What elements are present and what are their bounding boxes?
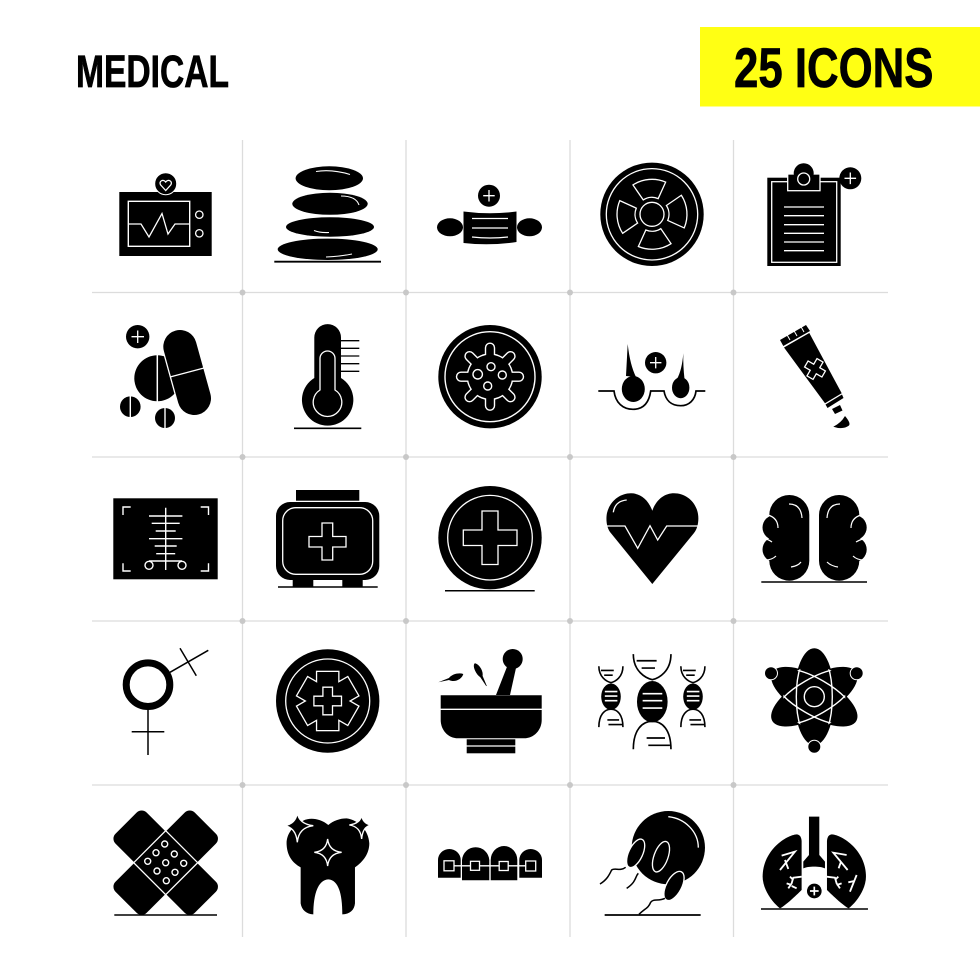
icon: medical mask [437, 185, 542, 244]
icon: mortar and pestle [438, 649, 542, 753]
icon: sperm and egg [600, 811, 705, 915]
icon: thermometer [294, 324, 361, 428]
icon: ointment tube [780, 325, 850, 428]
icon: plus circle [438, 486, 542, 591]
icon: clipboard [767, 163, 861, 266]
icon: gender symbol [126, 648, 208, 755]
icon: crossed bandages [111, 808, 221, 918]
icon: star of life emblem [276, 649, 379, 753]
badge: 25 icons [700, 27, 980, 106]
icon: heart monitor [119, 173, 212, 256]
icon: dental braces [438, 846, 542, 880]
icon: hair follicles [598, 344, 705, 409]
icon: dna strands [599, 654, 705, 749]
icon: lungs [761, 817, 868, 909]
icon: virus [438, 325, 542, 428]
icon: pills [120, 325, 204, 428]
icon: spa stones [274, 166, 381, 262]
icon: x-ray [113, 498, 218, 579]
icon: shining tooth [284, 812, 371, 914]
title: MEDICAL [76, 46, 229, 97]
icon: atom [762, 648, 866, 753]
icon: brain [761, 495, 867, 582]
icon: first aid kit [276, 490, 379, 587]
icon: heartbeat [606, 493, 698, 584]
icon: radiation [600, 163, 704, 266]
